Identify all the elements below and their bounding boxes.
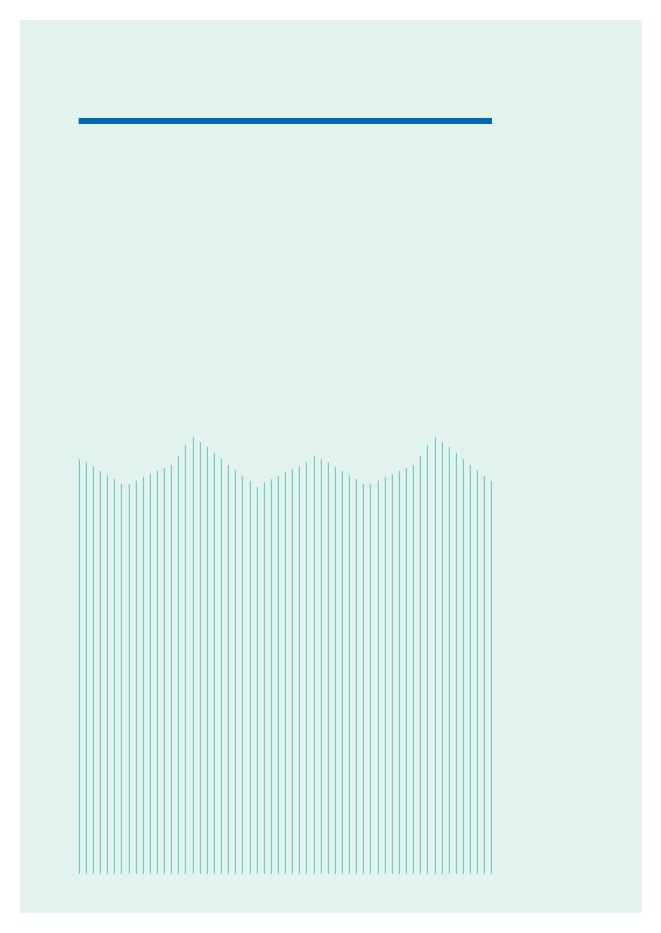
chart: vertical line wave <box>79 437 491 874</box>
heading bar <box>79 118 492 124</box>
